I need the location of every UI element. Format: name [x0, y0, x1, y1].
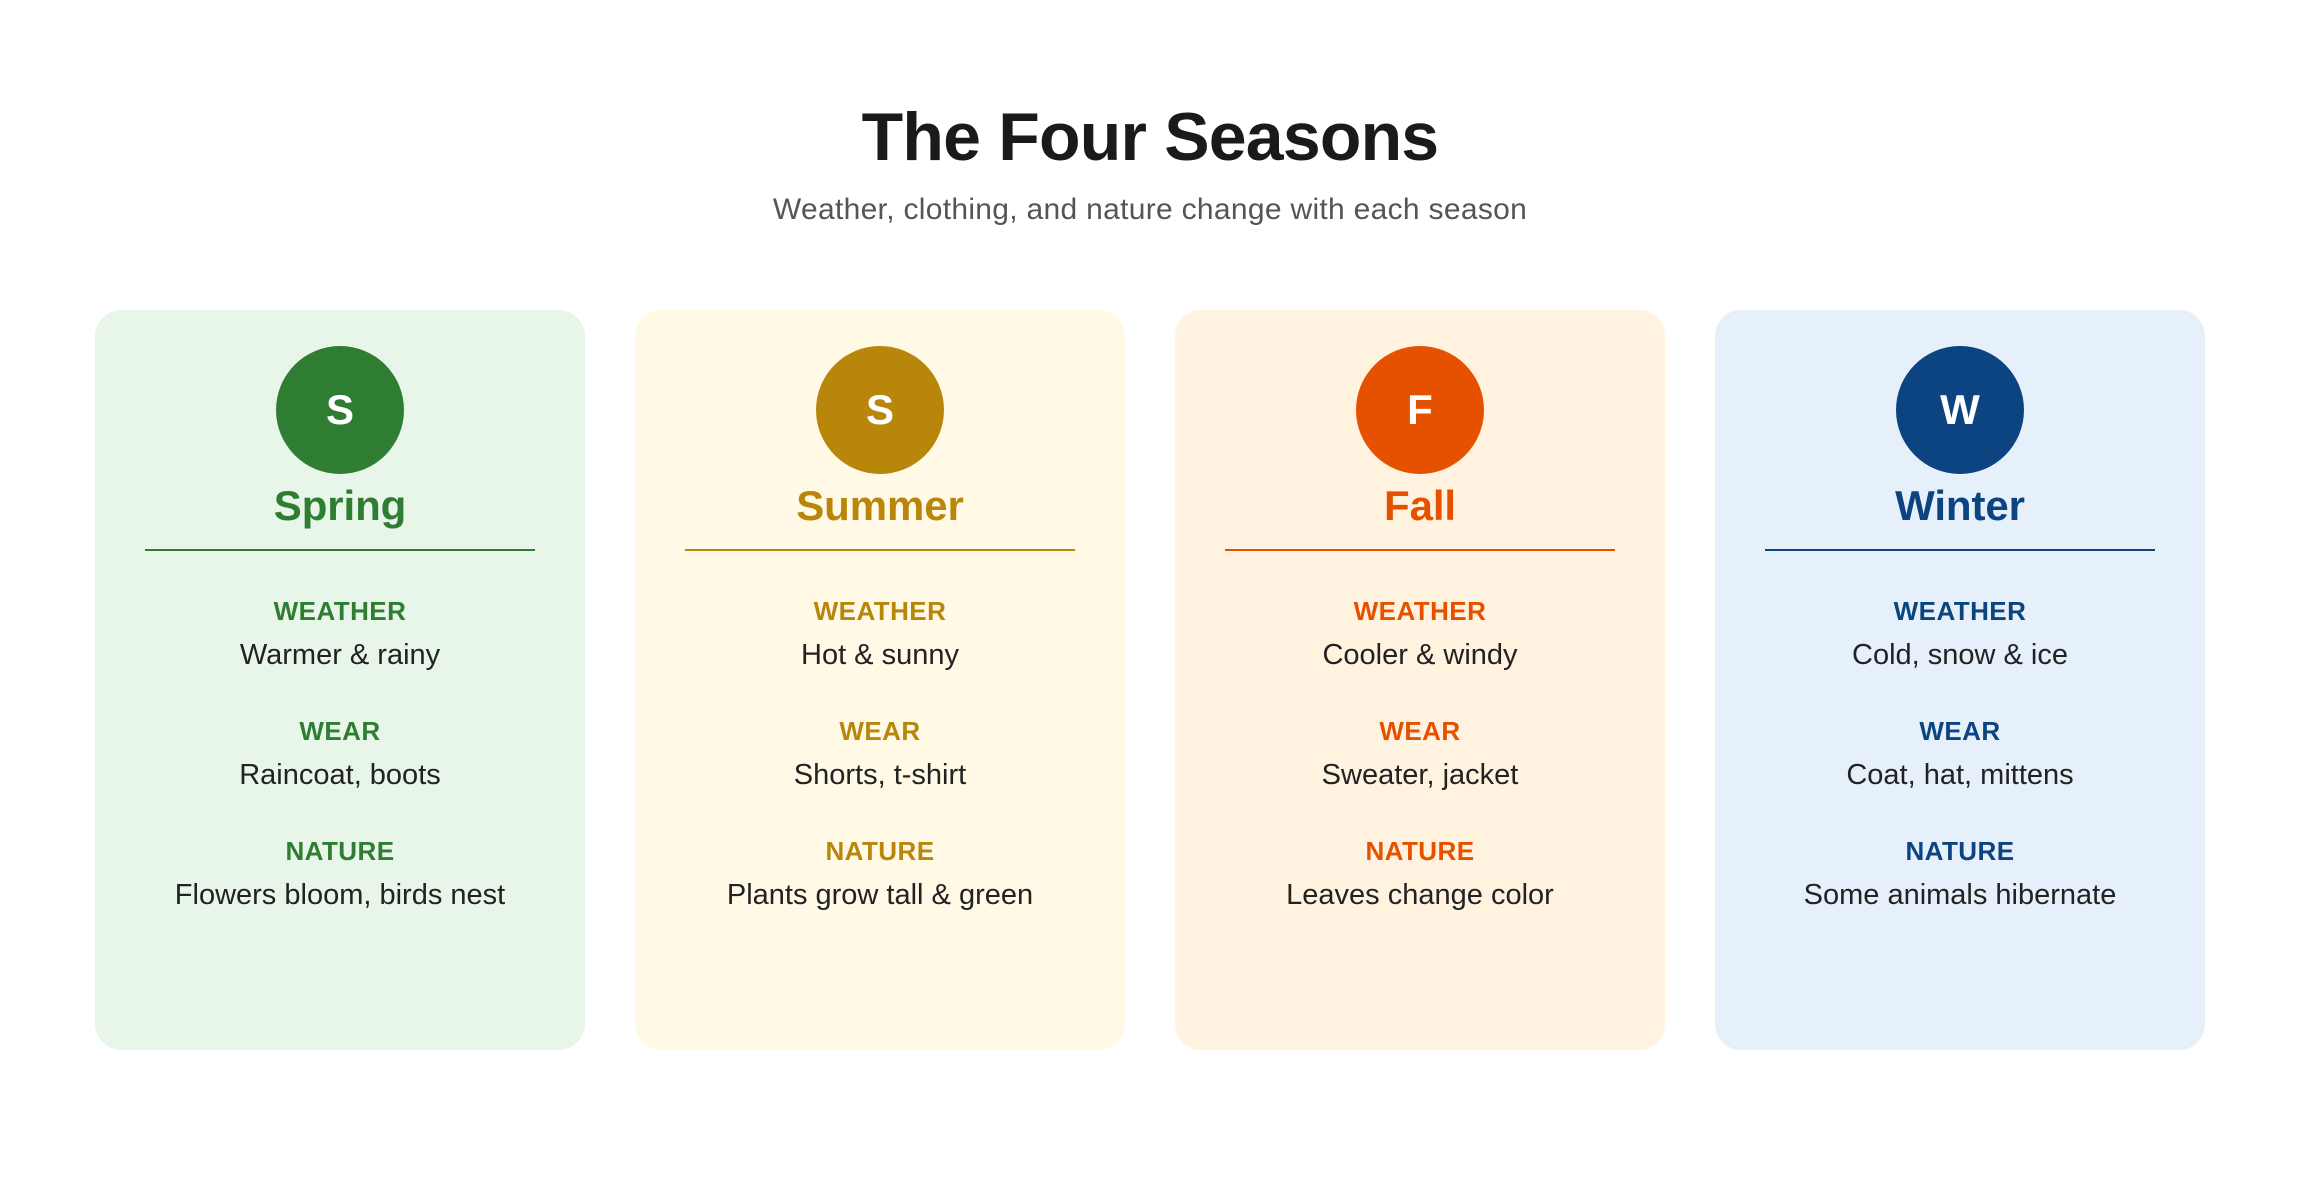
icon: spring badge: S	[326, 386, 354, 433]
wear: winter	[1846, 716, 2074, 791]
nature: winter: NATURE	[1905, 836, 2015, 866]
icon: summer badge: S	[866, 386, 894, 433]
weather: fall: Cooler & windy	[1322, 639, 1518, 671]
weather: summer: Hot & sunny	[801, 639, 959, 671]
nature: fall: Leaves change color	[1286, 879, 1554, 911]
wear: winter: Coat, hat, mittens	[1846, 759, 2074, 791]
wear: fall: Sweater, jacket	[1322, 759, 1518, 791]
weather: winter: Cold, snow & ice	[1852, 639, 2068, 671]
weather: spring	[240, 596, 441, 671]
wear: fall: WEAR	[1379, 716, 1461, 746]
heading: summer: Summer	[796, 482, 964, 529]
wear: spring: WEAR	[299, 716, 381, 746]
subtitle: Weather, clothing, and nature change with each season	[773, 193, 1527, 226]
title: The Four Seasons	[862, 99, 1438, 175]
nature: summer: Plants grow tall & green	[727, 879, 1033, 911]
weather: fall	[1322, 596, 1518, 671]
heading: spring: Spring	[274, 482, 406, 529]
panel: spring	[95, 310, 585, 1050]
weather: fall: WEATHER	[1354, 596, 1486, 626]
weather: winter: WEATHER	[1894, 596, 2026, 626]
nature: spring: NATURE	[285, 836, 395, 866]
heading: fall: Fall	[1384, 482, 1456, 529]
heading: winter: Winter	[1895, 482, 2025, 529]
wear: winter: WEAR	[1919, 716, 2001, 746]
nature: summer	[727, 836, 1033, 911]
wear: summer: WEAR	[839, 716, 921, 746]
weather: summer	[801, 596, 959, 671]
nature: fall	[1286, 836, 1554, 911]
weather: winter	[1852, 596, 2068, 671]
nature: summer: NATURE	[825, 836, 935, 866]
nature: spring: Flowers bloom, birds nest	[175, 879, 505, 911]
icon: summer badge	[816, 346, 944, 474]
panel: winter	[1715, 310, 2205, 1050]
panel: summer	[635, 310, 1125, 1050]
panel: fall	[1175, 310, 1665, 1050]
icon: fall badge	[1356, 346, 1484, 474]
weather: summer: WEATHER	[814, 596, 946, 626]
icon: winter badge	[1896, 346, 2024, 474]
weather: spring: Warmer & rainy	[240, 639, 441, 671]
nature: spring	[175, 836, 505, 911]
nature: winter: Some animals hibernate	[1804, 879, 2116, 911]
wear: summer: Shorts, t-shirt	[794, 759, 966, 791]
icon: spring badge	[276, 346, 404, 474]
weather: spring: WEATHER	[274, 596, 406, 626]
nature: fall: NATURE	[1365, 836, 1475, 866]
wear: spring: Raincoat, boots	[239, 759, 441, 791]
wear: fall	[1322, 716, 1518, 791]
wear: summer	[794, 716, 966, 791]
wear: spring	[239, 716, 441, 791]
nature: winter	[1804, 836, 2116, 911]
icon: fall badge: F	[1407, 386, 1433, 433]
icon: winter badge: W	[1940, 386, 1980, 433]
